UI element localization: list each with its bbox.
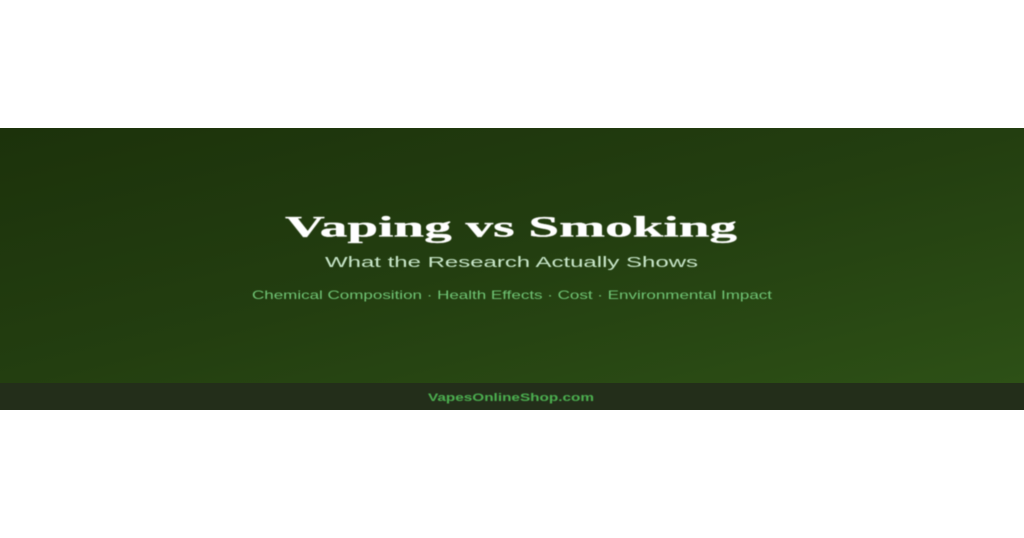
panel: footer bar <box>0 383 1024 410</box>
subtitle: What the Research Actually Shows <box>325 254 698 271</box>
title: Vaping vs Smoking <box>285 212 737 244</box>
footer website label: VapesOnlineShop.com <box>428 392 594 404</box>
panel: green banner background <box>0 128 1024 383</box>
topics line: Chemical Composition · Health Effects · Cost · Environmental Impact <box>252 288 773 302</box>
